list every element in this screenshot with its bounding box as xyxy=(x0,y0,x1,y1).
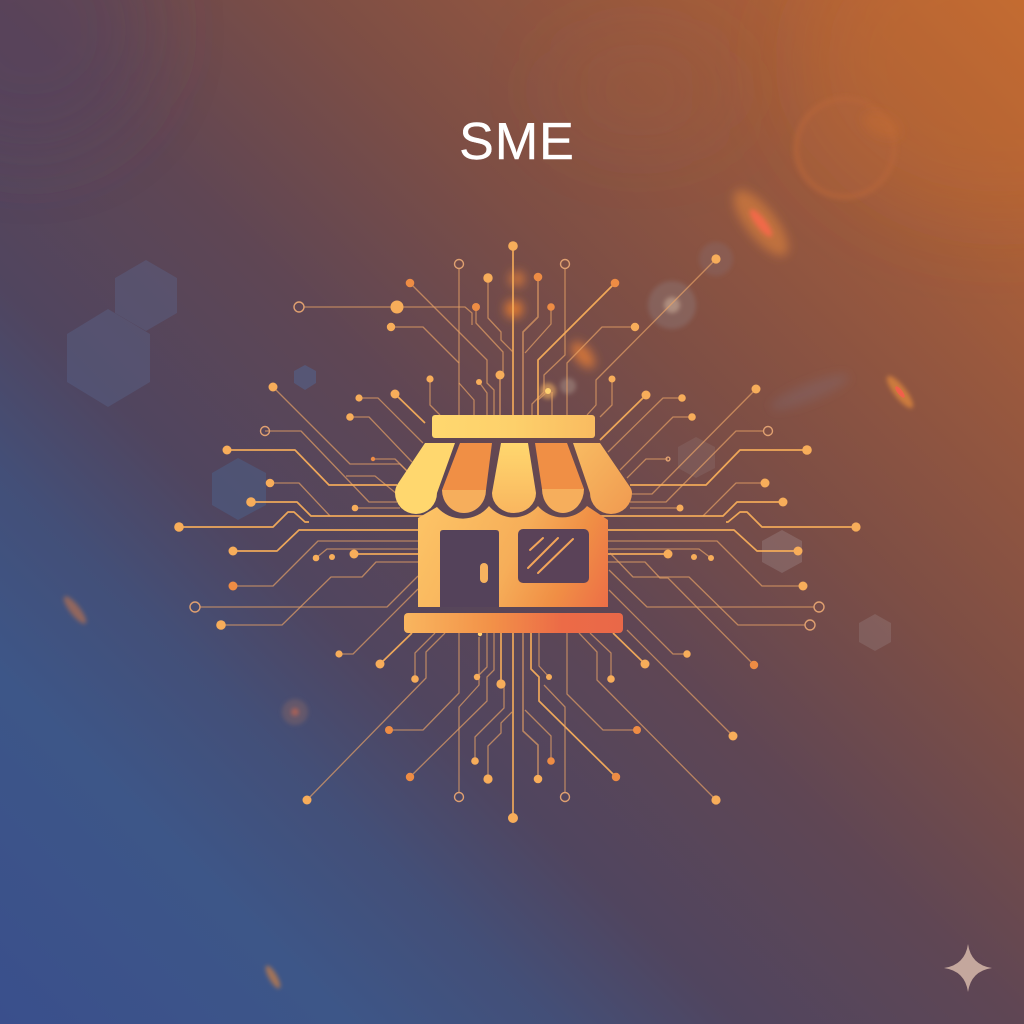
hexagons xyxy=(67,260,891,651)
title: SME xyxy=(459,113,575,171)
store door xyxy=(440,530,499,607)
icon: sparkle xyxy=(944,944,992,992)
circuit nodes xyxy=(174,241,861,823)
soft background light xyxy=(0,0,1024,220)
circuit lines: right xyxy=(600,379,856,665)
awning top bar xyxy=(432,415,595,438)
store building xyxy=(418,506,608,607)
circuit lines: top xyxy=(304,246,716,416)
icon: storefront xyxy=(395,415,632,633)
lens flares xyxy=(61,99,917,990)
circuit lines: bottom xyxy=(307,630,733,818)
circuit lines: left xyxy=(179,387,427,664)
store base xyxy=(404,613,623,633)
store window xyxy=(518,529,589,583)
awning stripes xyxy=(395,443,632,514)
